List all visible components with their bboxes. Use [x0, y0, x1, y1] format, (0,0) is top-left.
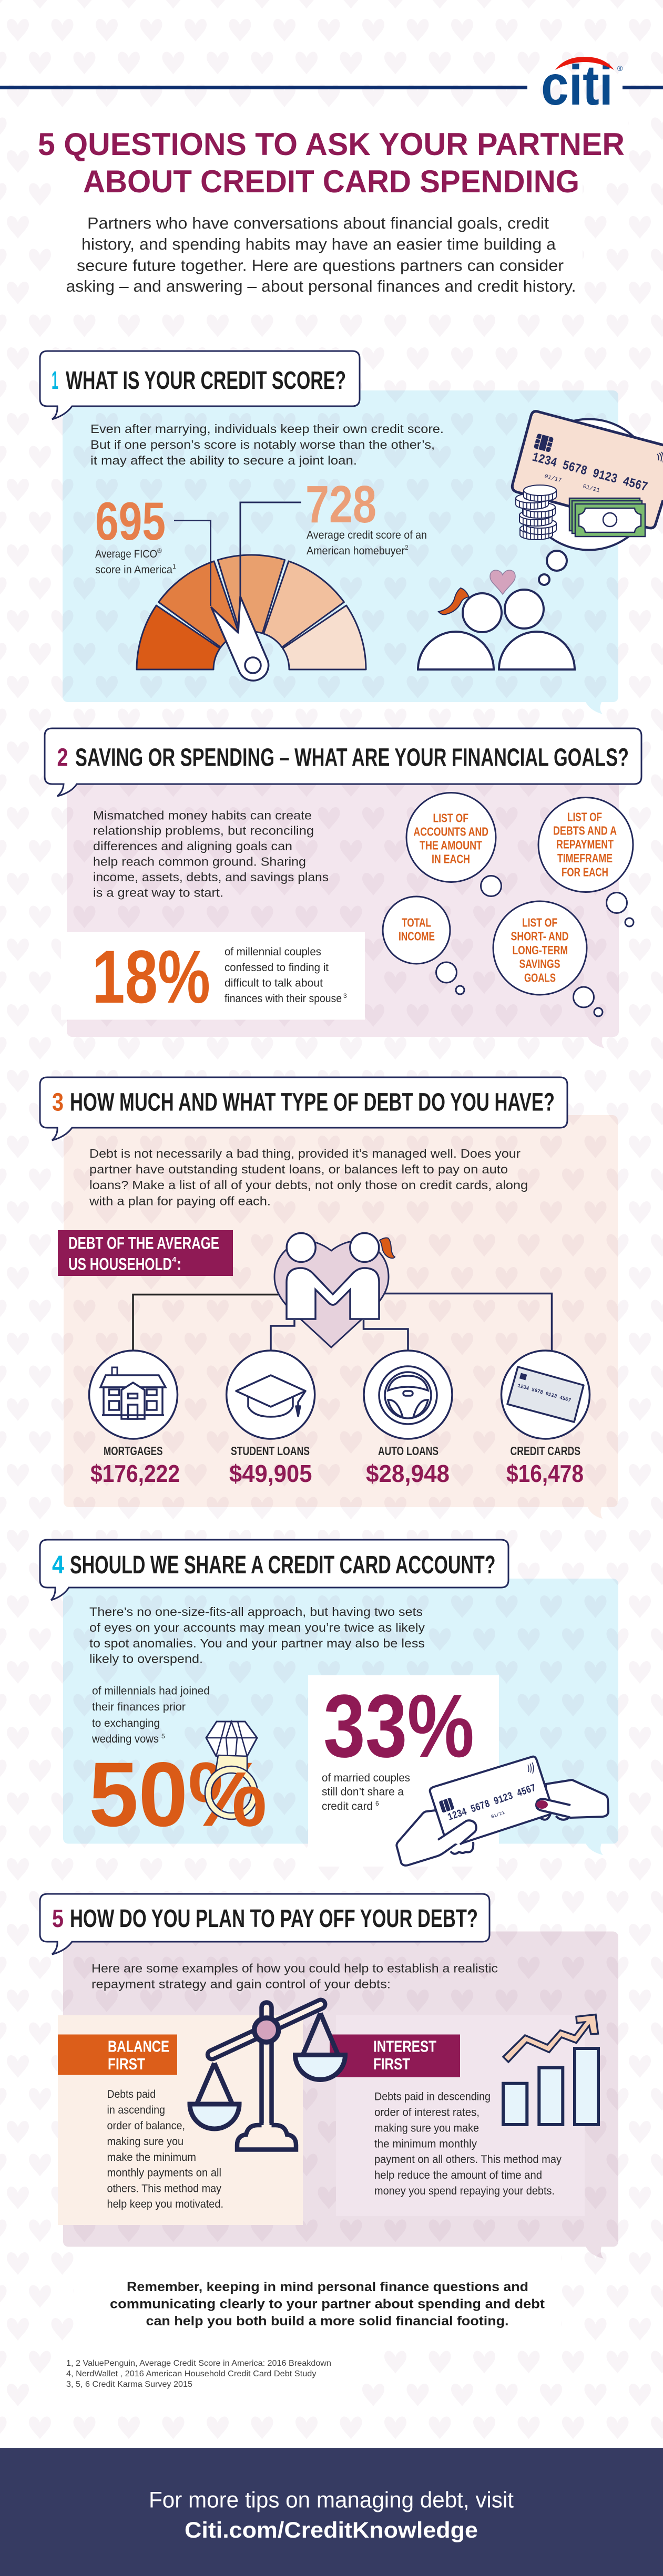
body text: likely to overspend. — [89, 1652, 203, 1666]
card: interest first: payment on all others. This method may — [374, 2153, 562, 2166]
body text: to spot anomalies. You and your partner may also be less — [89, 1636, 425, 1650]
card: interest first — [330, 2015, 585, 2216]
stat box: 33%: of married couples — [322, 1772, 410, 1784]
thought bubble: savings goals: LIST OF — [522, 915, 557, 929]
heading bubble: HOW DO YOU PLAN TO PAY OFF YOUR DEBT? — [70, 1905, 478, 1933]
item: auto loans: AUTO LOANS — [378, 1444, 438, 1458]
card: interest first: money you spend repaying your debts. — [374, 2185, 555, 2197]
stat box: 18%: 18% — [92, 935, 210, 1019]
gauge chart — [137, 555, 366, 669]
body text: differences and aligning goals can — [93, 839, 292, 853]
item: credit cards — [502, 1351, 590, 1487]
body text: with a plan for paying off each. — [89, 1194, 271, 1208]
panel background — [67, 778, 619, 1048]
footnotes: 3, 5, 6 Credit Karma Survey 2015 — [66, 2380, 192, 2389]
closing statement: can help you both build a more solid financial footing. — [146, 2314, 509, 2328]
heading bubble: WHAT IS YOUR CREDIT SCORE? — [66, 367, 346, 395]
intro text: history, and spending habits may have an easier time building a — [81, 235, 556, 253]
stat box: 33%: 6 — [375, 1800, 379, 1807]
thought bubble: accounts: IN EACH — [432, 852, 470, 866]
icon: credit card — [512, 411, 663, 528]
card: balance first: monthly payments on all — [107, 2167, 221, 2179]
stat: 728: 2 — [405, 544, 409, 551]
thought bubble: accounts: THE AMOUNT — [420, 839, 482, 852]
stat box: 18%: 3 — [343, 992, 347, 1000]
heading bubble: 3 — [52, 1089, 64, 1116]
card: interest first: help reduce the amount of time and — [374, 2169, 542, 2181]
card: balance first: make the minimum — [107, 2151, 196, 2163]
closing statement: Remember, keeping in mind personal finance questions and — [127, 2280, 528, 2294]
thought bubble: savings goals: SAVINGS — [519, 957, 560, 971]
intro text: Partners who have conversations about financial goals, credit — [87, 214, 549, 232]
body text: loans? Make a list of all of your debts, not only those on credit cards, along — [89, 1178, 528, 1192]
thought bubble: accounts — [406, 792, 502, 897]
body text: help reach common ground. Sharing — [93, 854, 306, 868]
heading bubble: 1 — [52, 367, 58, 395]
stat: 695: 1 — [172, 563, 176, 570]
thought bubble: accounts: LIST OF — [433, 811, 468, 825]
icon: couple in heart — [274, 1233, 395, 1347]
icon: balance scale — [190, 2002, 345, 2149]
body text: But if one person’s score is notably worse than the other’s, — [90, 438, 435, 451]
thought bubble: savings goals: SHORT- AND — [511, 929, 569, 943]
body text: income, assets, debts, and savings plans — [93, 870, 329, 884]
stat text: 50% — [91, 1685, 210, 1745]
thought bubble: total income: TOTAL — [402, 915, 431, 929]
icon: house — [100, 1367, 166, 1419]
body text: is a great way to start. — [93, 886, 223, 900]
item: student loans — [227, 1351, 315, 1487]
heading bubble — [40, 351, 360, 419]
thought bubble: debts — [538, 798, 634, 926]
thought bubble: total income: INCOME — [399, 929, 435, 943]
body text — [91, 1961, 498, 1991]
item: mortgages: MORTGAGES — [104, 1444, 163, 1458]
stat box: 18%: difficult to talk about — [225, 977, 323, 989]
card: interest first: FIRST — [373, 2055, 410, 2073]
stat: 728: 728 — [305, 475, 376, 534]
card: balance first: help keep you motivated. — [107, 2198, 223, 2210]
stat box: 18% — [61, 932, 365, 1019]
intro text — [66, 214, 576, 295]
heading bubble — [40, 1894, 489, 1954]
footer call to action — [0, 2448, 663, 2576]
stat text: 50%: of millennials had joined — [92, 1685, 210, 1697]
icon: hands holding card: 01/21 — [491, 1810, 506, 1820]
icon: graduation cap — [236, 1375, 305, 1417]
connector lines — [133, 1294, 552, 1351]
body text — [90, 422, 444, 467]
stat: 728: Average credit score of an — [307, 529, 427, 541]
icon: steering wheel — [379, 1366, 437, 1424]
panel: section 2 financial goals — [45, 728, 641, 1048]
thought bubble: savings goals — [493, 901, 603, 1016]
body text: There’s no one-size-fits-all approach, but having two sets — [89, 1605, 423, 1619]
body text: Even after marrying, individuals keep their own credit score. — [90, 422, 444, 436]
card: balance first: order of balance, — [107, 2120, 185, 2132]
card: interest first: order of interest rates, — [374, 2106, 480, 2119]
logo: citi: ® — [617, 64, 623, 73]
thought bubble: debts: REPAYMENT — [556, 838, 614, 851]
closing statement — [110, 2280, 545, 2328]
thought bubble: debts: DEBTS AND A — [553, 824, 617, 838]
icon: hands holding card: 1234 5678 9123 4567 — [446, 1782, 538, 1824]
stat box: 33%: credit card — [322, 1800, 373, 1812]
label: debt of the average household: : — [176, 1255, 182, 1274]
stat text: 50%: their finances prior — [92, 1701, 186, 1713]
panel: section 1 credit score — [40, 351, 663, 714]
panel background — [64, 1115, 618, 1519]
thought bubble: debts: TIMEFRAME — [557, 851, 613, 865]
card: balance first — [58, 2015, 303, 2225]
label: debt of the average household: DEBT OF THE AVERAGE — [68, 1234, 219, 1253]
body text — [93, 808, 329, 900]
stat box: 33% — [308, 1675, 499, 1867]
icon: hands holding card — [396, 1757, 608, 1866]
footnotes: 4, NerdWallet , 2016 American Household Credit Card Debt Study — [66, 2369, 317, 2378]
icon: coin stack — [516, 485, 556, 540]
footnotes — [66, 2359, 331, 2389]
card: interest first: INTEREST — [373, 2037, 436, 2056]
item: credit cards: $16,478 — [506, 1460, 584, 1487]
heading bubble: 2 — [57, 744, 68, 771]
icon: couple — [418, 570, 575, 669]
card: balance first: FIRST — [108, 2055, 145, 2073]
closing statement: communicating clearly to your partner about spending and debt — [110, 2296, 545, 2311]
intro text: secure future together. Here are questions partners can consider — [77, 256, 564, 274]
stat box: 18%: finances with their spouse — [225, 993, 342, 1005]
thought bubble: savings goals: GOALS — [524, 971, 556, 985]
item: mortgages: $176,222 — [90, 1460, 180, 1487]
stat: 695: ® — [157, 547, 162, 554]
heading bubble — [45, 728, 641, 796]
heading bubble: 5 — [52, 1905, 64, 1933]
stat: 695: score in America — [95, 564, 172, 576]
body text: Mismatched money habits can create — [93, 808, 312, 822]
gauge connector lines — [174, 502, 301, 631]
icon: diamond ring — [205, 1722, 258, 1819]
logo: citi: citi — [541, 53, 613, 117]
item: student loans: $49,905 — [229, 1460, 312, 1487]
item: auto loans — [364, 1351, 452, 1487]
thought bubble: debts: LIST OF — [567, 810, 602, 824]
stat text: 50%: to exchanging — [92, 1717, 160, 1729]
body text: partner have outstanding student loans, or balances left to pay on auto — [89, 1162, 508, 1176]
body text: it may affect the ability to secure a joint loan. — [90, 454, 357, 467]
thought bubble: debts: FOR EACH — [562, 865, 608, 879]
stat: 695: 695 — [95, 491, 166, 551]
item: student loans: STUDENT LOANS — [231, 1444, 310, 1458]
stat: 695: Average FICO — [95, 548, 157, 560]
icon: banknotes — [569, 498, 645, 537]
label: debt of the average household — [58, 1230, 233, 1276]
stat: 728: American homebuyer — [307, 545, 405, 557]
item: mortgages — [89, 1351, 180, 1487]
card: balance first: in ascending — [107, 2104, 165, 2116]
body text — [89, 1605, 425, 1666]
header rule — [0, 86, 663, 89]
title: ABOUT CREDIT CARD SPENDING — [83, 164, 579, 199]
gauge needle — [211, 596, 269, 681]
panel: section 5 pay off debt — [40, 1894, 618, 2259]
stat box: 33%: still don’t share a — [322, 1786, 404, 1798]
label: debt of the average household: US HOUSEHOLD — [68, 1255, 172, 1274]
card: balance first: Debts paid — [107, 2088, 156, 2100]
stat: 695 — [95, 491, 176, 576]
title — [38, 127, 625, 199]
stat: 50%: 50% — [89, 1743, 267, 1846]
footnotes: 1, 2 ValuePenguin, Average Credit Score in America: 2016 Breakdown — [66, 2359, 331, 2368]
stat box: 18%: confessed to finding it — [225, 962, 329, 974]
icon: credit card — [507, 1367, 584, 1422]
heading bubble — [40, 1077, 567, 1140]
heading bubble: SHOULD WE SHARE A CREDIT CARD ACCOUNT? — [70, 1551, 495, 1579]
card: balance first: others. This method may — [107, 2183, 221, 2194]
panel background — [63, 1579, 618, 1855]
panel background — [63, 390, 618, 714]
stat text: 50%: 5 — [161, 1733, 165, 1740]
stat: 728 — [305, 475, 427, 557]
icon: credit card: 01/21 — [582, 483, 600, 494]
body text: of eyes on your accounts may mean you’re twice as likely — [89, 1621, 425, 1634]
title: 5 QUESTIONS TO ASK YOUR PARTNER — [38, 127, 625, 162]
heading bubble: 4 — [52, 1551, 64, 1579]
card: interest first: Debts paid in descending — [374, 2090, 491, 2103]
stat box: 33%: 33% — [323, 1676, 474, 1776]
thought bubble: savings goals: LONG-TERM — [512, 943, 568, 957]
icon: credit card: 1234 5678 9123 4567 — [517, 1383, 572, 1404]
body text — [89, 1147, 528, 1208]
intro text: asking – and answering – about personal finances and credit history. — [66, 277, 576, 295]
footer call to action: Citi.com/CreditKnowledge — [185, 2518, 478, 2543]
thought bubble with card, coins and cash — [512, 411, 663, 585]
footer call to action: For more tips on managing debt, visit — [149, 2488, 514, 2513]
panel: section 3 debt — [40, 1077, 618, 1519]
label: debt of the average household: 4 — [172, 1255, 177, 1264]
body text: Debt is not necessarily a bad thing, provided it’s managed well. Does your — [89, 1147, 521, 1160]
thought bubble: total income — [383, 897, 464, 994]
item: auto loans: $28,948 — [366, 1460, 450, 1487]
body text: repayment strategy and gain control of your debts: — [91, 1977, 391, 1991]
panel background — [63, 1932, 618, 2259]
body text: relationship problems, but reconciling — [93, 824, 314, 838]
panel: section 4 share account — [40, 1540, 618, 1867]
thought bubble: accounts: ACCOUNTS AND — [413, 825, 488, 839]
card: interest first: the minimum monthly — [374, 2138, 477, 2150]
body text: Here are some examples of how you could help to establish a realistic — [91, 1961, 498, 1975]
icon: rising bar chart — [503, 2015, 598, 2125]
card: balance first: BALANCE — [108, 2037, 169, 2056]
stat box: 18%: of millennial couples — [225, 946, 321, 958]
card: interest first: making sure you make — [374, 2122, 479, 2135]
ring front overlap — [204, 1754, 249, 1818]
heading bubble — [40, 1540, 508, 1600]
card: balance first: making sure you — [107, 2136, 183, 2148]
item: credit cards: CREDIT CARDS — [510, 1444, 580, 1458]
icon: credit card: 01/17 — [544, 473, 562, 484]
stat text: 50%: wedding vows — [91, 1733, 159, 1745]
